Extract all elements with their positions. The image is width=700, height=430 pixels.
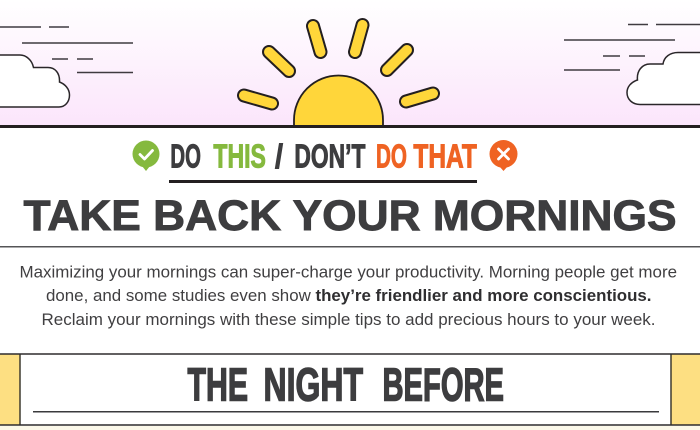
intro paragraph: done, and some studies even show they’re friendlier and more conscientious. [46, 286, 652, 305]
section banner [0, 354, 700, 425]
subtitle: do this / don't do that: / [275, 139, 283, 176]
subtitle: do this / don't do that [170, 139, 477, 176]
subtitle underline [169, 180, 477, 183]
banner left tab [0, 354, 20, 425]
subtitle: do this / don't do that: DON’T [294, 139, 366, 176]
icon: green check bubble [132, 140, 160, 171]
subtitle: do this / don't do that: THAT [413, 139, 477, 176]
title divider [0, 246, 700, 248]
cream strip [0, 426, 700, 430]
icon: orange x bubble [490, 140, 518, 171]
left speed lines [0, 27, 133, 72]
right speed lines [564, 24, 700, 70]
subtitle: do this / don't do that: DO [170, 139, 201, 176]
icon: left cloud [0, 55, 70, 107]
banner right tab [671, 354, 700, 425]
icon: right cloud [627, 52, 700, 104]
subtitle: do this / don't do that: DO [376, 139, 407, 176]
intro paragraph: Reclaim your mornings with these simple tips to add precious hours to your week. [42, 310, 656, 329]
title: TAKE BACK YOUR MORNINGS [24, 192, 676, 240]
banner heading: BEFORE [382, 358, 504, 410]
intro paragraph: Maximizing your mornings can super-charge your productivity. Morning people get more [20, 262, 677, 282]
banner underline [33, 411, 659, 412]
banner heading: THE [188, 358, 248, 410]
icon: sun [244, 25, 433, 126]
subtitle: do this / don't do that: THIS [213, 139, 266, 176]
banner heading [188, 358, 504, 410]
banner heading: NIGHT [264, 358, 363, 410]
sun rays [244, 25, 433, 104]
intro paragraph [20, 262, 677, 329]
sky background [0, 0, 700, 126]
horizon line [0, 125, 700, 128]
